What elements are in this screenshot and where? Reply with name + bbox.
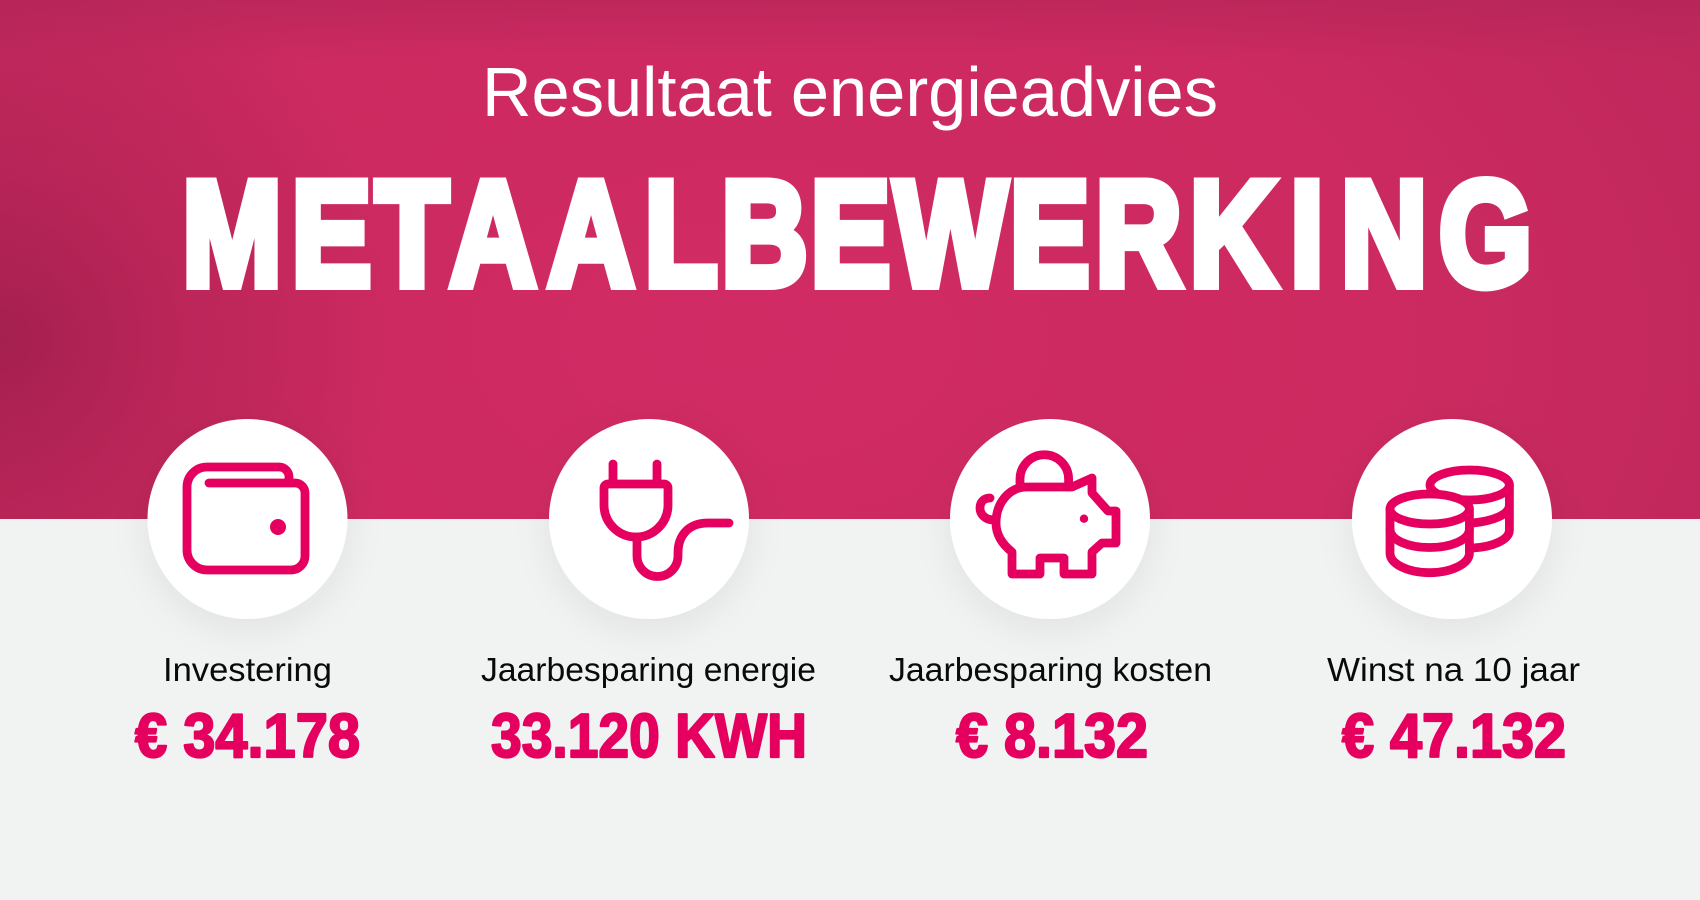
label: winst na 10 jaar: Winst na 10 jaar: [1327, 651, 1580, 688]
value: jaarbesparing kosten: € 8.132: [956, 702, 1148, 771]
value: winst na 10 jaar: € 47.132: [1342, 702, 1566, 771]
label: jaarbesparing kosten: Jaarbesparing kosten: [889, 651, 1212, 688]
panel: jaarbesparing kosten: [889, 419, 1212, 771]
title: subtitle line: Resultaat energieadvies: [482, 53, 1218, 131]
panel: investering: [135, 419, 360, 771]
icon circle: plug: [549, 419, 749, 619]
icon: piggy bank: [980, 455, 1116, 574]
icon: plug: [604, 464, 729, 576]
icon circle: wallet: [148, 419, 348, 619]
icon: wallet: [187, 467, 305, 570]
value: investering: € 34.178: [135, 702, 360, 771]
icon: coin stacks: [1390, 470, 1509, 573]
panel: jaarbesparing energie: [481, 419, 816, 771]
value: jaarbesparing energie: 33.120 KWH: [491, 702, 807, 771]
crimson header band: [0, 0, 1700, 519]
icon circle: piggy bank: [950, 419, 1150, 619]
label: jaarbesparing energie: Jaarbesparing energie: [481, 651, 816, 688]
icon circle: coins: [1352, 419, 1552, 619]
panel: winst na 10 jaar: [1327, 419, 1580, 771]
label: investering: Investering: [163, 651, 332, 688]
title: main heading: METAALBEWERKING: [182, 150, 1532, 317]
